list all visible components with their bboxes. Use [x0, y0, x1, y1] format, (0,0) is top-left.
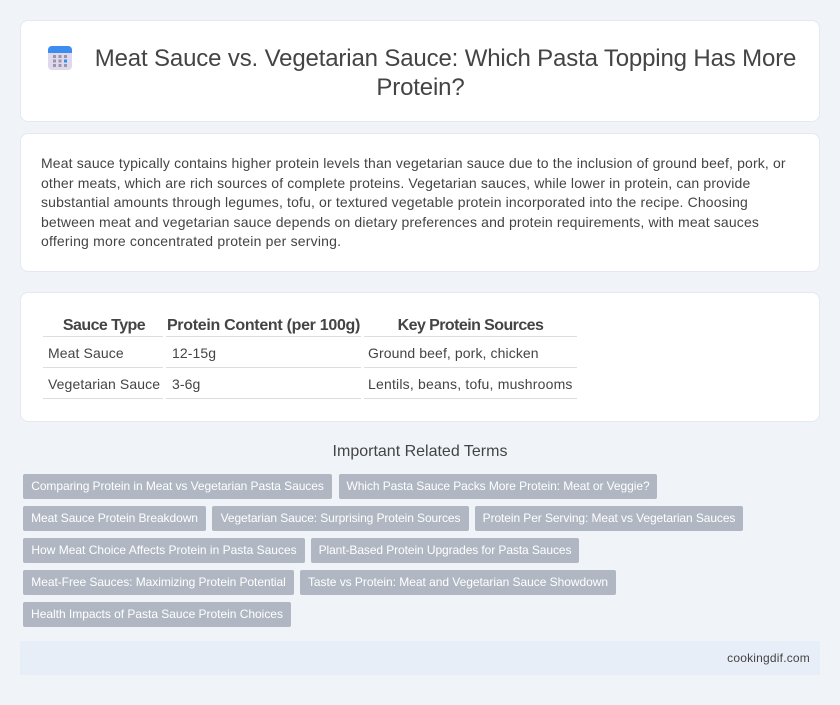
comparison table [43, 317, 577, 399]
related term tags: Vegetarian Sauce: Surprising Protein Sources [221, 511, 460, 525]
related term tags: Plant-Based Protein Upgrades for Pasta Sauces [319, 543, 571, 557]
comparison table: 12-15g [172, 345, 216, 361]
heading: related terms: Important Related Terms [333, 443, 507, 460]
summary paragraph [41, 155, 786, 249]
icon: calendar [48, 46, 72, 70]
summary paragraph: other meats, which are rich sources of complete proteins. Vegetarian sauces, while lower in protein, can provide [41, 175, 750, 191]
comparison table: Sauce Type [63, 317, 145, 334]
related term tags: Taste vs Protein: Meat and Vegetarian Sauce Showdown [308, 575, 608, 589]
summary paragraph: substantial amounts through legumes, tofu, or textured vegetable protein incorporated into the recipe. Choosing [41, 194, 748, 210]
panel: comparison table [20, 292, 820, 422]
comparison table: Ground beef, pork, chicken [368, 345, 539, 361]
related term tags: Comparing Protein in Meat vs Vegetarian Pasta Sauces [31, 479, 324, 493]
comparison table: Key Protein Sources [398, 317, 543, 334]
panel: summary text [20, 133, 820, 272]
summary paragraph: offering more concentrated protein per serving. [41, 233, 341, 249]
related term tags: Meat Sauce Protein Breakdown [31, 511, 198, 525]
comparison table: Meat Sauce [48, 345, 124, 361]
title [95, 45, 796, 101]
comparison table: Protein Content (per 100g) [167, 317, 360, 334]
related term tags: How Meat Choice Affects Protein in Pasta Sauces [31, 543, 297, 557]
summary paragraph: Meat sauce typically contains higher protein levels than vegetarian sauce due to the inclusion of ground beef, pork, or [41, 155, 786, 171]
title: Meat Sauce vs. Vegetarian Sauce: Which Pasta Topping Has More [95, 45, 796, 72]
footer [20, 641, 820, 675]
comparison table: 3-6g [172, 376, 200, 392]
related term tags: Which Pasta Sauce Packs More Protein: Meat or Veggie? [346, 479, 650, 493]
comparison table: Lentils, beans, tofu, mushrooms [368, 376, 573, 392]
summary paragraph: between meat and vegetarian sauce depends on dietary preferences and protein requirements, with meat sauces [41, 214, 759, 230]
footer source: cookingdif.com [727, 651, 810, 665]
title: Protein? [376, 74, 465, 101]
related term tags: Health Impacts of Pasta Sauce Protein Choices [31, 607, 283, 621]
related term tags: Meat-Free Sauces: Maximizing Protein Potential [31, 575, 286, 589]
header panel [20, 20, 820, 122]
related term tags [23, 474, 743, 627]
comparison table: Vegetarian Sauce [48, 376, 160, 392]
related term tags: Protein Per Serving: Meat vs Vegetarian Sauces [483, 511, 735, 525]
